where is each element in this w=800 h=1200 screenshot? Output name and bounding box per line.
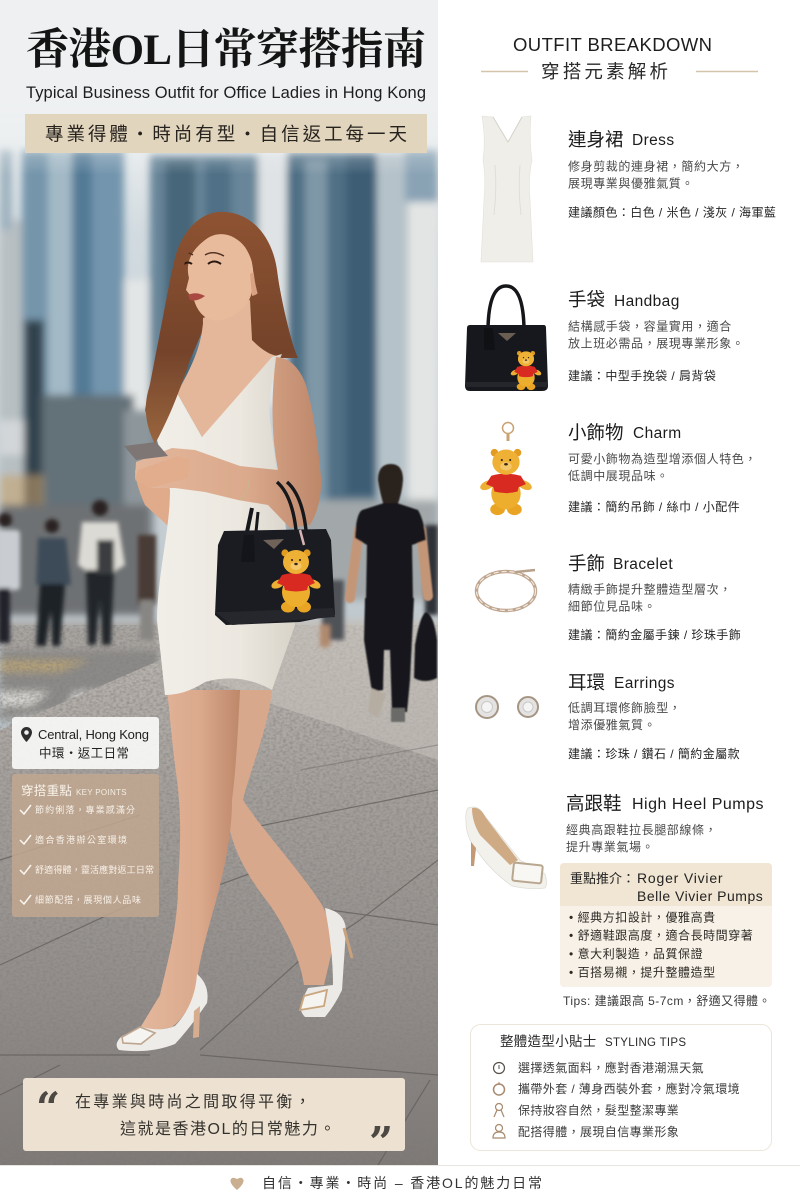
face [186, 234, 254, 320]
item: earrings: 低調耳環修飾臉型， [568, 700, 681, 715]
item: high heel pumps: 經典高跟鞋拉長腿部線條， [566, 822, 717, 837]
handbag [215, 482, 335, 625]
key point 3: 舒適得體，靈活應對返工日常 [35, 864, 154, 875]
item: handbag: 手袋 [568, 289, 605, 310]
item: dress: 建議顏色：白色 / 米色 / 淺灰 / 海軍藍 [568, 204, 776, 220]
item: dress: Dress [632, 132, 674, 149]
item: earrings: Earrings [614, 675, 675, 692]
item: bracelet [476, 553, 741, 642]
shoe back foot [301, 908, 346, 1017]
panel: recommendation [560, 863, 772, 987]
item: bracelet: 細節位見品味。 [568, 598, 656, 614]
item: handbag: 放上班必需品，展現專業形象。 [568, 336, 744, 350]
panel: styling tips: 整體造型小貼士 [500, 1034, 597, 1049]
quote callout: “ [36, 1083, 60, 1132]
heading: outfit breakdown [481, 34, 758, 82]
dress [157, 354, 295, 695]
item: high heel pumps [466, 793, 764, 889]
item: bracelet: 手飾 [568, 553, 605, 574]
key point 2: 適合香港辦公室環境 [35, 834, 127, 845]
panel: recommendation: • 百搭易襯，提升整體造型 [569, 964, 716, 980]
location card: 中環・返工日常 [39, 746, 129, 760]
icon: pump [466, 807, 546, 889]
footer: 自信・專業・時尚 – 香港OL的魅力日常 [262, 1175, 542, 1191]
panel: key points: KEY POINTS [76, 788, 127, 797]
item: dress [481, 116, 776, 262]
item: dress: 連身裙 [568, 129, 624, 150]
item: bracelet: 建議：簡約金屬手鍊 / 珍珠手飾 [568, 627, 741, 642]
panel: right background [438, 0, 800, 1165]
city buildings [0, 150, 438, 615]
subtitle: Typical Business Outfit for Office Ladies in Hong Kong [26, 84, 426, 102]
quote callout: ” [369, 1118, 393, 1167]
panel: recommendation: • 經典方扣設計，優雅高貴 [569, 910, 716, 924]
panel: recommendation: Belle Vivier Pumps [637, 888, 763, 904]
tagline banner [25, 114, 427, 153]
fingers [135, 456, 190, 488]
background pedestrians [0, 500, 438, 647]
near arm and shoulder [135, 357, 321, 528]
item: high heel pumps: 提升專業氣場。 [566, 839, 654, 854]
tip 2: 攜帶外套 / 薄身西裝外套，應對冷氣環境 [518, 1081, 740, 1096]
bracelet [240, 480, 249, 500]
item: handbag [465, 286, 744, 391]
quote callout [23, 1078, 405, 1167]
pavement joints [0, 745, 438, 1165]
item: dress: 展現專業與優雅氣質。 [568, 176, 694, 190]
tip 3: 保持妝容自然，髮型整潔專業 [518, 1102, 679, 1118]
item: bracelet: Bracelet [613, 556, 673, 573]
phone [124, 442, 168, 460]
item: charm: 低調中展現品味。 [568, 468, 669, 483]
heading: outfit breakdown: OUTFIT BREAKDOWN [513, 34, 712, 55]
key point 4: 細節配搭，展現個人品味 [35, 894, 141, 905]
location card [12, 717, 159, 769]
item: bracelet: 精緻手飾提升整體造型層次， [568, 582, 732, 596]
item: handbag: Handbag [614, 293, 680, 310]
icon: earrings [476, 696, 538, 718]
item: high heel pumps: 高跟鞋 [566, 793, 622, 814]
neck and chest [177, 300, 278, 437]
icon: charm [479, 422, 533, 515]
heading: outfit breakdown: 穿搭元素解析 [541, 61, 671, 82]
panel: recommendation: • 舒適鞋跟高度，適合長時間穿著 [569, 928, 753, 942]
panel: key points: 穿搭重點 [21, 783, 72, 798]
icon: bracelet [476, 570, 536, 610]
item: handbag: 結構感手袋，容量實用，適合 [568, 318, 732, 334]
tip 4: 配搭得體，展現自信專業形象 [518, 1124, 679, 1139]
item: earrings [476, 672, 740, 761]
item: charm: 可愛小飾物為造型增添個人特色， [568, 451, 757, 466]
hair front [146, 212, 297, 444]
item: high heel pumps: High Heel Pumps [632, 796, 764, 813]
far arm [135, 470, 172, 526]
item: charm [479, 422, 757, 515]
haze top [0, 0, 438, 175]
front leg [140, 690, 240, 1030]
panel: styling tips: STYLING TIPS [605, 1037, 686, 1049]
quote callout: 這就是香港OL的日常魅力。 [120, 1119, 337, 1138]
panel: styling tips [470, 1024, 772, 1150]
item: earrings: 增添優雅氣質。 [568, 717, 656, 732]
panel: street photo background [0, 0, 438, 1165]
item: handbag: 建議：中型手挽袋 / 肩背袋 [568, 368, 716, 383]
item: charm: 小飾物 [568, 422, 624, 443]
quote callout: 在專業與時尚之間取得平衡， [75, 1093, 313, 1111]
icon: handbag [465, 286, 548, 391]
panel: recommendation: • 意大利製造，品質保證 [569, 946, 703, 961]
item: charm: Charm [633, 425, 682, 442]
footer [0, 1166, 800, 1191]
location card: Central, Hong Kong [38, 727, 149, 742]
key point 1: 節約俐落，專業感滿分 [35, 804, 135, 815]
back leg [223, 690, 332, 985]
shoe front foot [117, 974, 208, 1051]
man walking away [350, 464, 437, 722]
tagline banner: 專業得體・時尚有型・自信返工每一天 [45, 124, 407, 144]
woman [117, 212, 352, 1051]
street and pavement [0, 620, 438, 720]
item: dress: 修身剪裁的連身裙，簡約大方， [568, 158, 744, 174]
item: charm: 建議：簡約吊飾 / 絲巾 / 小配件 [568, 499, 740, 514]
panel: key points [12, 774, 159, 917]
back hair [145, 212, 298, 444]
tips note: Tips: 建議跟高 5-7cm，舒適又得體。 [563, 993, 771, 1008]
panel: recommendation: Roger Vivier [637, 870, 723, 886]
icon: dress [481, 116, 533, 262]
item: earrings: 建議：珍珠 / 鑽石 / 簡約金屬款 [568, 746, 740, 761]
panel: recommendation: 重點推介： [570, 871, 635, 886]
item: earrings: 耳環 [568, 672, 605, 693]
tip 1: 選擇透氣面料，應對香港潮濕天氣 [518, 1060, 704, 1075]
title: 香港OL日常穿搭指南 [26, 26, 426, 74]
